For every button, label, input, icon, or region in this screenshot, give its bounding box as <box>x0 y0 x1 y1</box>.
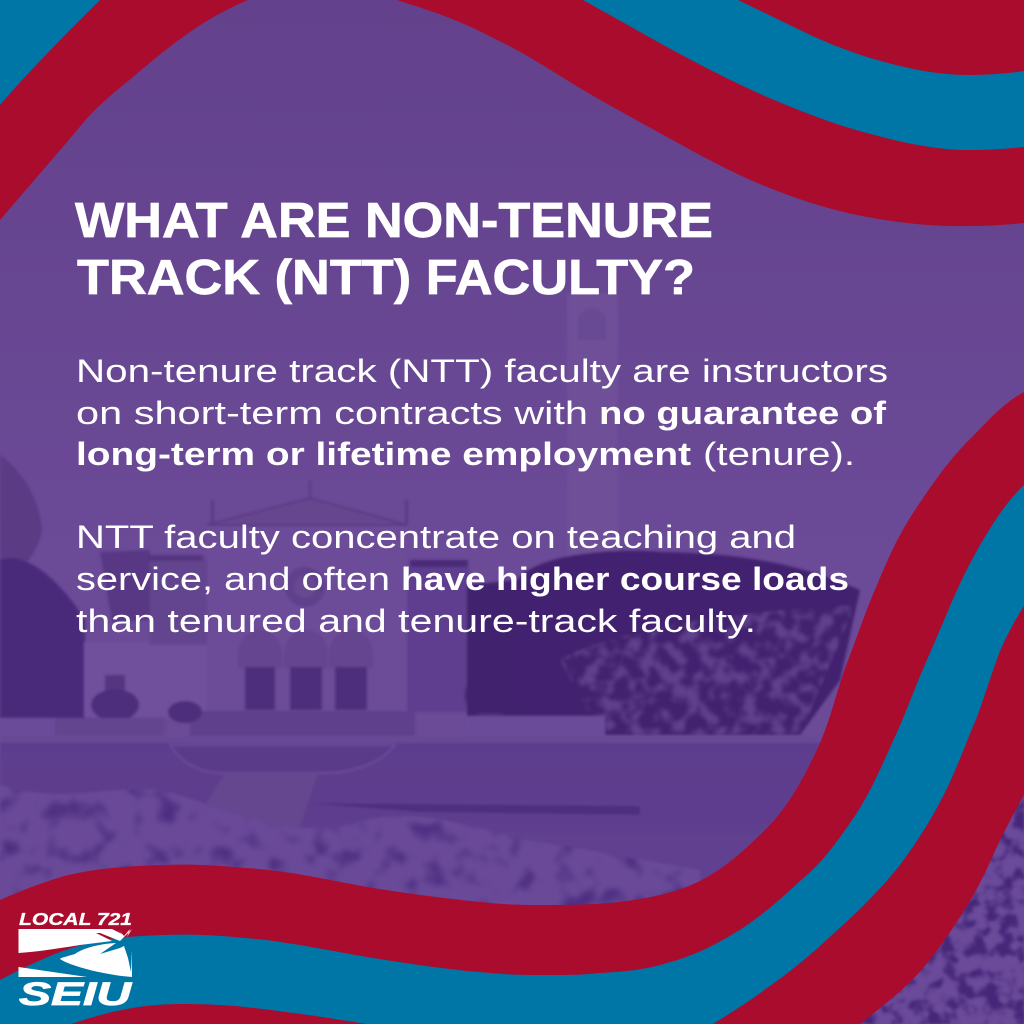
dark block right of the chapel <box>467 585 519 713</box>
paragraph: definition of NTT faculty <box>76 353 888 472</box>
paragraph: teaching and course loads: NTT faculty concentrate on teaching and <box>76 519 796 555</box>
bell tower <box>567 293 618 563</box>
paragraph: teaching and course loads: have higher course loads <box>401 561 849 597</box>
left wing <box>84 555 208 717</box>
logo: SEIU Local 721: LOCAL 721 <box>19 909 132 929</box>
palm behind left wing <box>100 550 150 622</box>
paragraph: teaching and course loads <box>76 519 849 639</box>
wave: top left red band <box>0 0 248 220</box>
wave: bottom and right red band <box>0 392 1024 1024</box>
tree highlights <box>560 605 855 735</box>
footpath <box>165 773 318 870</box>
title: WHAT ARE NON-TENURE <box>75 194 713 248</box>
wave: bottom small red band <box>71 1004 367 1024</box>
semicircular stairs <box>170 745 395 773</box>
right trees <box>467 551 860 735</box>
paragraph: definition of NTT faculty: no guarantee of <box>599 395 886 431</box>
paragraph: definition of NTT faculty: Non-tenure track (NTT) faculty are instructors <box>76 353 888 389</box>
right wing <box>407 560 469 712</box>
wave: bottom and right teal band <box>0 485 1024 1024</box>
wave: top right red band <box>397 0 1024 226</box>
paragraph: teaching and course loads: than tenured and tenure-track faculty. <box>76 603 756 639</box>
entrance steps <box>190 711 415 737</box>
background photo: campus chapel in purple duotone <box>0 293 1024 1024</box>
title: TRACK (NTT) FACULTY? <box>77 251 695 305</box>
paragraph: definition of NTT faculty: long-term or lifetime employment <box>76 436 691 472</box>
shrubs beside the chapel <box>91 673 516 723</box>
paragraph: teaching and course loads: service, and often <box>76 561 390 597</box>
foliage lower right <box>800 740 1024 1024</box>
logo: SEIU Local 721 <box>18 909 132 1012</box>
chapel facade <box>207 480 408 713</box>
wave: top right teal band <box>583 0 1024 150</box>
wave: top left teal corner <box>0 0 100 105</box>
palm tree left <box>0 455 42 570</box>
paragraph: definition of NTT faculty: on short-term contracts with <box>76 395 588 431</box>
logo: SEIU Local 721: SEIU <box>19 976 132 1012</box>
flower bed <box>1 786 698 905</box>
ground <box>0 736 860 1024</box>
low hedges <box>0 716 605 736</box>
paragraph: definition of NTT faculty: (tenure). <box>703 436 855 472</box>
left trees <box>0 558 85 740</box>
title <box>75 194 713 305</box>
lawn shadow streak <box>306 803 640 815</box>
arches and doors <box>238 630 373 710</box>
